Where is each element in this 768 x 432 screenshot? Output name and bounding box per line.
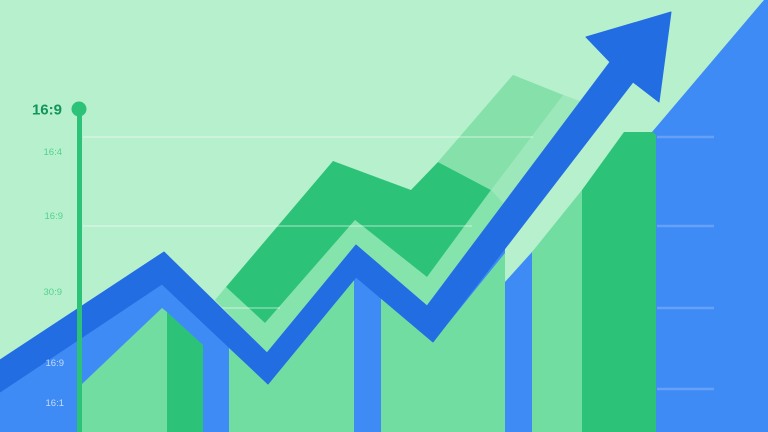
- axis label: 5: 16:9: [46, 358, 64, 369]
- horizontal grid lines: [83, 137, 533, 308]
- blue area: below trend line: [0, 248, 505, 432]
- light green band above trend line: [215, 75, 582, 353]
- axis label: 2: 16:4: [44, 147, 62, 158]
- axis top marker: [72, 102, 86, 116]
- bar 3: [381, 253, 505, 432]
- axis label: top: 16:9: [32, 102, 62, 118]
- axis label: 6: 16:1: [46, 398, 64, 409]
- bar 1: [82, 308, 167, 432]
- right side tick marks: [657, 137, 714, 389]
- bar 1 dark side: [167, 312, 203, 432]
- axis label: 3: 16:9: [44, 211, 63, 222]
- dark green area: [226, 161, 491, 323]
- upper green band section: [438, 75, 563, 190]
- pale upper strip of band: [491, 95, 582, 205]
- vertical axis: [77, 109, 82, 432]
- blue area: right side: [504, 0, 768, 432]
- bar 5: [582, 132, 656, 432]
- trend arrow: [0, 12, 671, 392]
- bar 4: [532, 190, 582, 432]
- axis label: 4: 30:9: [44, 287, 62, 298]
- bar 2: [229, 280, 354, 432]
